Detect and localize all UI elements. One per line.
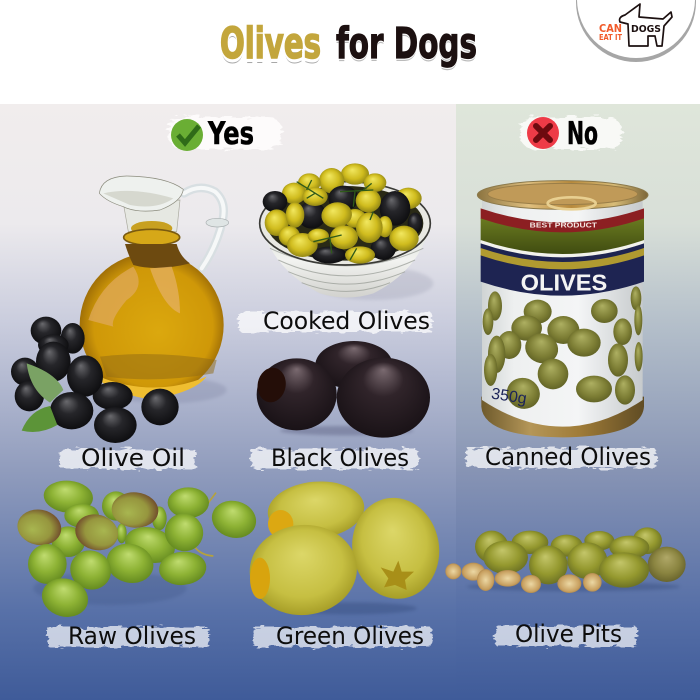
net weight text: 350g (490, 385, 528, 408)
label: cooked olives: Cooked Olives (263, 307, 430, 335)
title: for Dogs (336, 22, 477, 72)
label: black olives: Black Olives (271, 444, 409, 472)
illustration: raw olives (15, 479, 260, 622)
label: olive pits: Olive Pits (515, 620, 622, 648)
jug spout (99, 176, 183, 211)
panel: no (456, 104, 700, 700)
olives on can (483, 286, 643, 413)
bowl (260, 223, 431, 297)
logo: can eat it dogs: CAN (599, 22, 622, 35)
label: raw olives: Raw Olives (68, 622, 196, 650)
pits (445, 563, 602, 593)
label bands (481, 208, 644, 296)
yes text: Yes (207, 116, 254, 152)
no header (520, 116, 622, 152)
illustration: olive oil jug with black olives (11, 176, 229, 443)
can body (482, 200, 643, 427)
yes header (168, 116, 282, 152)
olives in bowl (282, 163, 422, 209)
logo: can eat it dogs: EAT IT (599, 33, 622, 42)
best product text: BEST PRODUCT (530, 220, 597, 229)
label: green olives: Green Olives (276, 622, 424, 650)
icon: red cross (527, 117, 559, 149)
can bottom rim (481, 397, 644, 437)
panel: yes (0, 104, 456, 700)
can lid (477, 181, 648, 209)
title: Olives (220, 19, 321, 69)
olive leaves (27, 363, 63, 403)
olives text: OLIVES (521, 269, 607, 295)
title: for Dogs (336, 20, 477, 70)
no text: No (567, 116, 598, 152)
jug neck (123, 200, 180, 232)
illustration: green olives (246, 478, 447, 620)
illustration: black olives (255, 341, 430, 438)
black olives (11, 317, 179, 443)
dill herbs (297, 180, 373, 260)
jug body (80, 253, 224, 397)
illustration: olive pits (445, 527, 686, 593)
title: for Dogs (336, 19, 477, 69)
logo: can eat it dogs: DOGS (631, 24, 661, 35)
illustration: canned olives (477, 181, 648, 437)
title: Olives (220, 24, 321, 74)
title: Olives (220, 22, 321, 72)
label: olive oil: Olive Oil (81, 444, 185, 472)
jug handle (184, 188, 224, 268)
logo: can eat it dogs (576, 0, 696, 62)
label: canned olives: Canned Olives (485, 443, 651, 471)
title (220, 19, 477, 74)
illustration: bowl of cooked olives (260, 163, 433, 300)
icon: green check (171, 119, 203, 151)
